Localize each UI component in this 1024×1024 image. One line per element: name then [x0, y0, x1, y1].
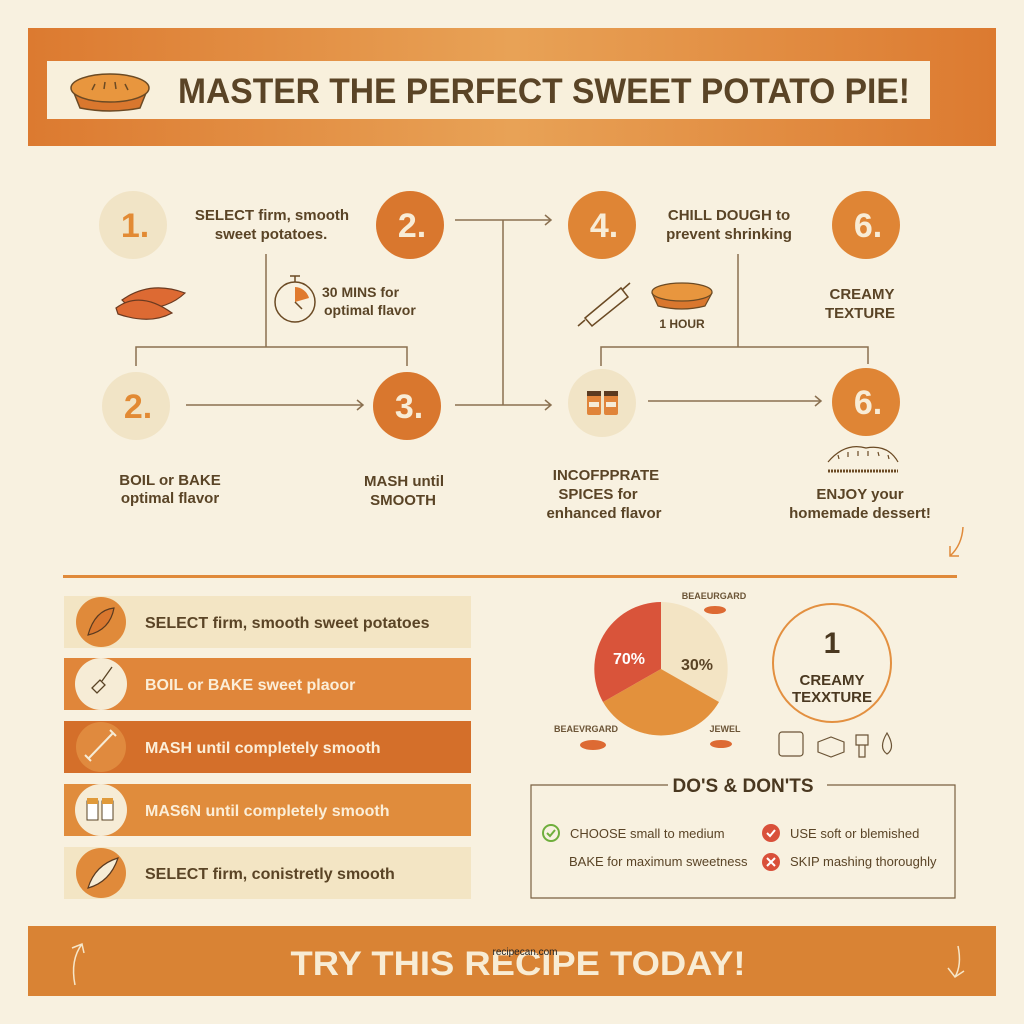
divider: [63, 575, 957, 578]
icon: rolling pin: [578, 283, 630, 326]
step texts: CHILL DOUGH to: [668, 207, 790, 224]
step texts: optimal flavor: [121, 490, 219, 507]
icon: pie small: [652, 283, 712, 309]
do's and don'ts: DO'S & DON'TS: [672, 776, 814, 797]
bar 1: [64, 596, 471, 648]
icon: pie: [71, 74, 149, 111]
step texts: MASH until: [364, 473, 444, 490]
icon: timer: [275, 276, 315, 322]
step circles: 4.: [590, 207, 618, 245]
pie chart: 30%: [681, 657, 713, 674]
list bars: [64, 596, 471, 899]
bar 5: [64, 847, 471, 899]
step texts: ENJOY your: [816, 486, 904, 503]
step texts: BOIL or BAKE: [119, 472, 221, 489]
creamy texture circle: CREAMY: [799, 672, 865, 689]
step texts: [119, 207, 931, 522]
bar 5: SELECT firm, conistretly smooth: [145, 866, 395, 883]
step texts: prevent shrinking: [666, 226, 792, 243]
header band: [28, 28, 996, 146]
step texts: homemade dessert!: [789, 505, 931, 522]
bar 3: MASH until completely smooth: [145, 740, 381, 757]
do's and don'ts: CHOOSE small to medium: [570, 826, 725, 841]
step texts: SELECT firm, smooth: [195, 207, 349, 224]
small arrow: [950, 527, 963, 556]
pie chart: 70%: [613, 651, 645, 668]
pie chart: JEWEL: [709, 724, 741, 734]
creamy texture circle: 1: [824, 627, 840, 660]
text: optimal flavor: [324, 302, 416, 318]
step circles: 1.: [121, 207, 149, 245]
do's and don'ts: BAKE for maximum sweetness: [569, 854, 748, 869]
ingredient icons: [779, 732, 892, 757]
text: 30 MINS for: [322, 284, 400, 300]
creamy texture circle: TEXXTURE: [792, 689, 872, 706]
footer band: [28, 926, 996, 996]
pie chart: BEAEVRGARD: [554, 724, 618, 734]
icon: spice jars: [587, 391, 618, 415]
do's and don'ts: [531, 776, 955, 898]
step texts: sweet potatoes.: [215, 226, 327, 243]
bar 4: MAS6N until completely smooth: [145, 803, 389, 820]
bar 2: [64, 658, 471, 710]
connectors: [136, 215, 868, 410]
creamy texture circle: [773, 604, 891, 722]
text: 1 HOUR: [659, 317, 705, 331]
title: MASTER THE PERFECT SWEET POTATO PIE!: [178, 72, 910, 111]
bar 3: [64, 721, 471, 773]
step circles: 6.: [854, 207, 882, 245]
step circles: 6.: [854, 384, 882, 422]
footer band: recipecan.com: [492, 947, 558, 958]
icon: pie crust: [828, 447, 898, 471]
do's and don'ts: SKIP mashing thoroughly: [790, 854, 937, 869]
pie chart: [554, 591, 747, 750]
step texts: SMOOTH: [370, 492, 436, 509]
step texts: TEXTURE: [825, 305, 895, 322]
bar 4: [64, 784, 471, 836]
icon: sweet potatoes: [116, 288, 185, 319]
step circles: [99, 191, 900, 440]
footer band: TRY THIS RECIPE TODAY!: [290, 945, 746, 983]
step circles: 2.: [124, 388, 152, 426]
step circles: 2.: [398, 207, 426, 245]
bar 2: BOIL or BAKE sweet plaoor: [145, 677, 355, 694]
bar 1: SELECT firm, smooth sweet potatoes: [145, 615, 430, 632]
step texts: INCOFPPRATE: [553, 467, 659, 484]
step circles: 3.: [395, 388, 423, 426]
do's and don'ts: USE soft or blemished: [790, 826, 919, 841]
pie chart: BEAEURGARD: [682, 591, 747, 601]
step texts: enhanced flavor: [546, 505, 662, 522]
step texts: CREAMY: [829, 286, 895, 303]
step texts: SPICES for: [558, 486, 638, 503]
